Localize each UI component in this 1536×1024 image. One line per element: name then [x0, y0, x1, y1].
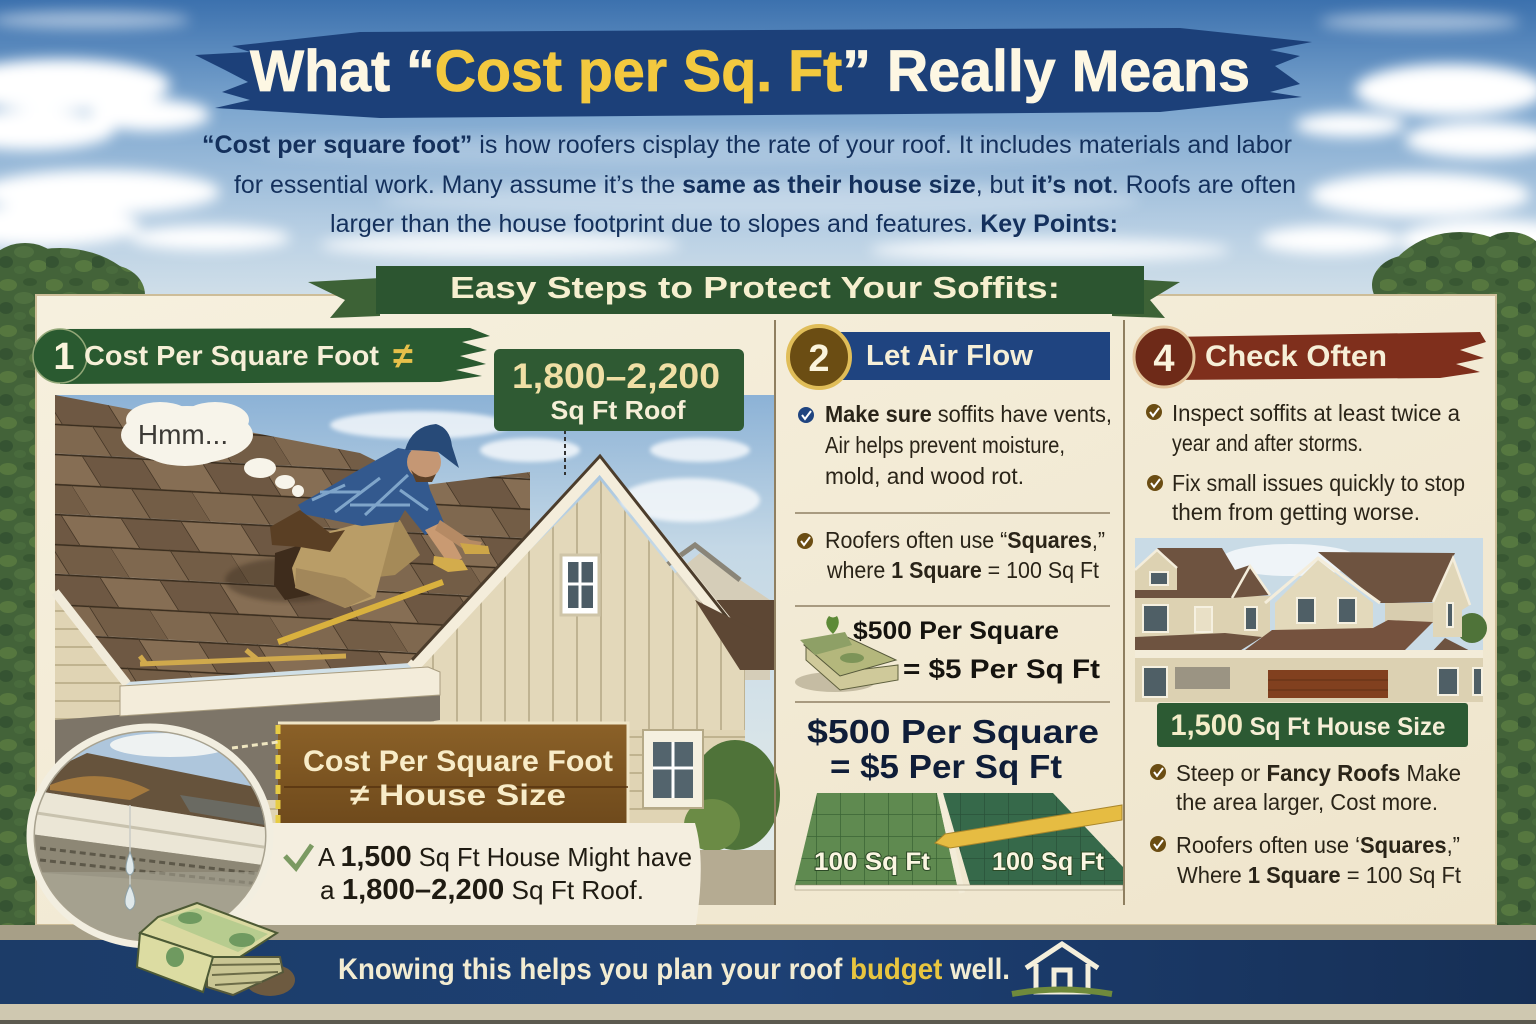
bullet text: steep roofs: the area larger, Cost more. — [1176, 789, 1438, 815]
bullet text: steep roofs: Steep or Fancy Roofs Make — [1176, 760, 1461, 786]
boot — [274, 545, 310, 600]
callout: cost per square foot not house size: ≠ House Size — [350, 779, 566, 812]
text: house vs roof example: A 1,500 Sq Ft House Might have — [318, 841, 692, 873]
title text: What “Cost per Sq. Ft” Really Means — [250, 39, 1250, 104]
callout: cost per square foot not house size: Cost Per Square Foot — [303, 745, 613, 778]
callout: roof size: Sq Ft Roof — [550, 395, 686, 425]
column 3: check often: 1,500 Sq Ft House Size — [1170, 709, 1446, 742]
callout: roof size — [494, 349, 744, 431]
bullet text: fix — [1147, 470, 1465, 525]
yellow strip on shingles — [140, 650, 346, 664]
lower roofs — [1135, 633, 1262, 652]
right roof — [695, 600, 775, 670]
gutter — [120, 667, 440, 716]
bullet text: squares: Roofers often use “Squares,” — [825, 527, 1105, 553]
footer band — [0, 925, 1536, 1024]
bullet text: fix: them from getting worse. — [1172, 499, 1420, 525]
house wall — [55, 590, 745, 835]
callout: roof size: 1,800–2,200 — [512, 357, 720, 396]
intro paragraph: larger than the house footprint due to slopes and features. Key Points: — [330, 210, 1118, 238]
dashed connector — [232, 742, 278, 748]
left house walls — [1135, 596, 1270, 638]
bullet text: steep roofs — [1150, 760, 1461, 815]
main cream panel — [36, 295, 1496, 925]
far leg — [370, 520, 420, 578]
house size banner — [1157, 703, 1468, 747]
ribbon heading: Easy Steps to Protect Your Soffits: — [450, 270, 1060, 305]
intro paragraph — [202, 131, 1296, 238]
bullet text: vents: Make sure soffits have vents, — [825, 401, 1112, 427]
step 2 header: Let Air Flow — [866, 340, 1033, 372]
step 4 header — [1134, 327, 1486, 387]
step 4 header: 4 — [1153, 338, 1175, 380]
lower window — [643, 730, 703, 808]
icon: money pile — [137, 903, 295, 996]
gable trim — [412, 465, 748, 668]
distant house — [655, 553, 770, 680]
bullet text: inspect: Inspect soffits at least twice a — [1172, 400, 1460, 426]
column 2: let air flow: = $5 Per Sq Ft — [903, 654, 1100, 684]
fascia left — [55, 592, 127, 684]
icon: house outline — [1012, 944, 1112, 994]
inset circle: gutter leak — [30, 725, 270, 945]
bullet text: squares: Roofers often use ‘Squares,” — [1176, 832, 1460, 858]
measuring tape — [278, 582, 443, 642]
column 2: let air flow — [788, 326, 1123, 893]
bullet text: squares: Where 1 Square = 100 Sq Ft — [1177, 862, 1462, 888]
price text: $500 Per Square — [853, 617, 1059, 645]
roof main — [55, 395, 530, 682]
cream patch behind text — [230, 823, 701, 925]
large price text: = $5 Per Sq Ft — [830, 748, 1062, 785]
ground floor — [1135, 650, 1483, 658]
illustration sky — [55, 395, 775, 905]
bullet text: squares: where 1 Square = 100 Sq Ft — [826, 557, 1100, 583]
step 2 header: 2 — [808, 338, 830, 380]
panel: roof illustration — [55, 395, 780, 925]
step 1 header: Cost Per Square Foot — [84, 340, 379, 371]
column 3: check often — [1134, 327, 1487, 888]
icon: thought bubble: Hmm... — [138, 419, 228, 450]
footer text: Knowing this helps you plan your roof budget well. — [338, 953, 1010, 986]
gravel path — [660, 850, 775, 905]
intro paragraph: “Cost per square foot” is how roofers cisplay the rate of your roof. It includes materials and labor — [202, 131, 1292, 159]
shadow on wall below eave — [55, 695, 440, 800]
text: house vs roof example: a 1,800–2,200 Sq Ft Roof. — [320, 874, 644, 906]
bullet text: fix: Fix small issues quickly to stop — [1172, 470, 1465, 496]
right house main roof — [1318, 552, 1455, 603]
bush — [690, 740, 780, 850]
bullet text: inspect — [1146, 400, 1460, 456]
roofer figure — [225, 424, 490, 608]
icon: money stack — [795, 616, 898, 692]
step 1 header — [33, 328, 490, 384]
step 4 header: Check Often — [1205, 340, 1387, 373]
diagram: two squares: 100 Sq Ft — [814, 848, 931, 876]
large price text: $500 Per Square — [807, 713, 1099, 750]
bullet text: vents — [798, 401, 1112, 489]
forearm — [425, 522, 462, 566]
gloves — [433, 556, 468, 572]
step 2 header — [788, 326, 1110, 388]
step 1 header: ≠ — [393, 335, 413, 376]
ribbon heading — [308, 266, 1180, 318]
intro paragraph: for essential work. Many assume it’s the same as their house size, but it’s not. Roofs are often — [234, 171, 1296, 199]
bullet text: inspect: year and after storms. — [1172, 430, 1363, 456]
diagram: two squares — [795, 793, 1123, 893]
bullet text: squares — [797, 527, 1105, 583]
callout stem dashed — [564, 430, 566, 475]
text: house vs roof example — [285, 841, 692, 906]
bullet text: vents: Air helps prevent moisture, — [825, 432, 1065, 458]
tool belt — [270, 510, 345, 552]
title banner — [195, 28, 1312, 118]
icon: thought bubble — [121, 402, 304, 497]
diagram: two squares: 100 Sq Ft — [992, 848, 1105, 876]
callout: cost per square foot not house size — [278, 723, 628, 823]
trees on both sides — [0, 232, 1536, 940]
large price text — [807, 713, 1099, 785]
step 1 header: 1 — [53, 336, 75, 378]
column dividers — [775, 320, 1124, 905]
gable window — [561, 555, 599, 615]
head — [407, 445, 441, 479]
bullet text: squares — [1150, 832, 1462, 888]
near leg — [292, 522, 395, 608]
torso shirt — [298, 448, 445, 535]
bullet text: vents: mold, and wood rot. — [825, 463, 1024, 489]
house illustration — [1135, 538, 1487, 702]
